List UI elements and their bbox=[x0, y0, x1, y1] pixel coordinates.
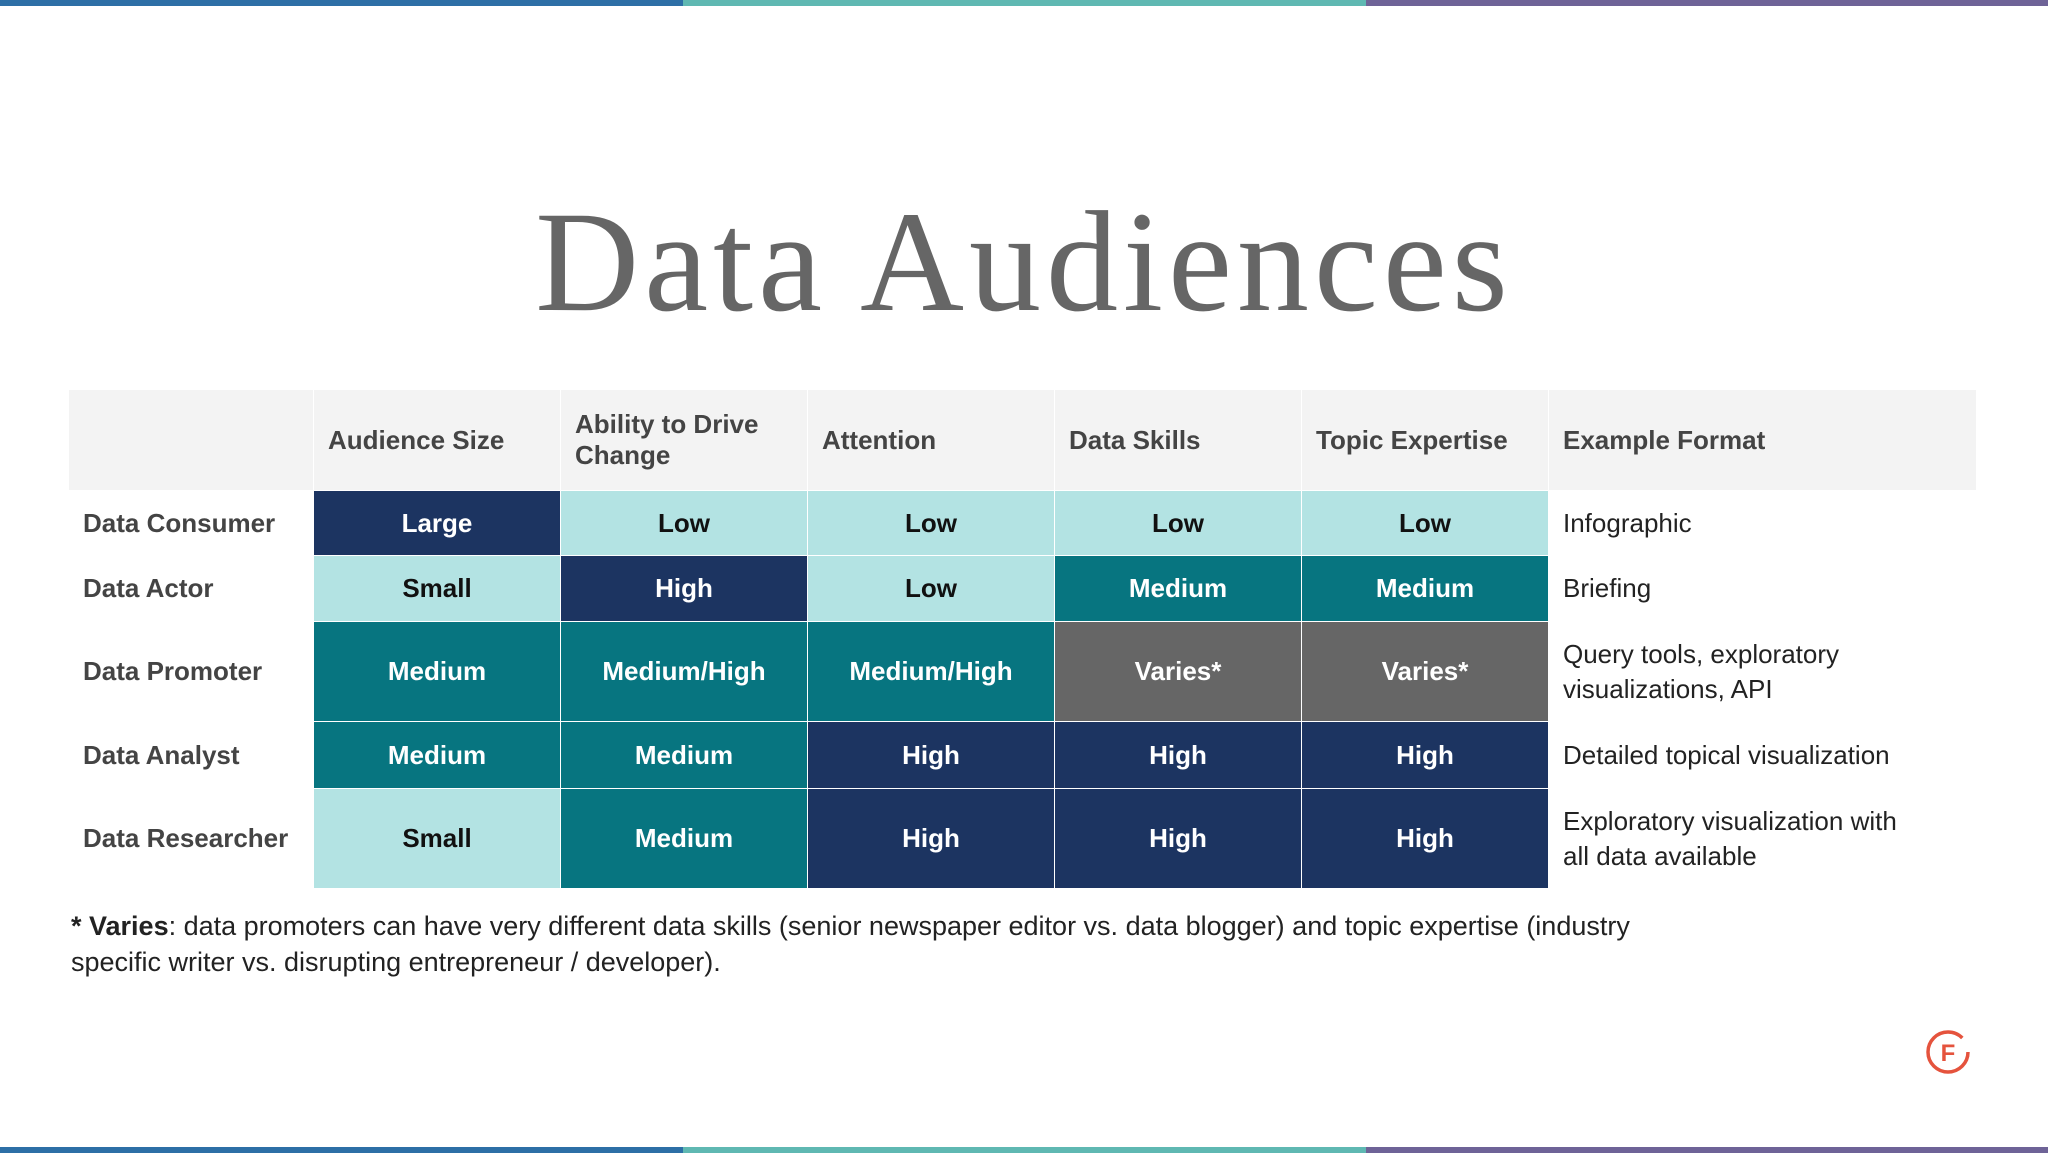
title: Data Audiences bbox=[535, 183, 1513, 342]
table: data audiences: Large bbox=[402, 508, 472, 538]
table: data audiences: High bbox=[1149, 823, 1207, 853]
table: data audiences: Topic Expertise bbox=[1316, 424, 1508, 454]
table: data audiences: High bbox=[655, 573, 713, 603]
icon: logo: F bbox=[1941, 1040, 1955, 1067]
table: data audiences: Varies* bbox=[1382, 656, 1468, 686]
table: data audiences: Audience Size bbox=[328, 424, 504, 454]
table: data audiences: Medium bbox=[388, 740, 486, 770]
table: data audiences: High bbox=[1396, 740, 1454, 770]
table: data audiences: High bbox=[902, 740, 960, 770]
table: data audiences: Example Format bbox=[1563, 424, 1765, 454]
table: data audiences: Infographic bbox=[1563, 508, 1692, 538]
table: data audiences: Attention bbox=[822, 424, 936, 454]
table: data audiences: Data Promoter bbox=[83, 656, 262, 686]
footnote: * Varies: data promoters can have very different data skills (senior newspaper editor vs. data blogger) and topic expertise (industry specific writer vs. disrupting entrepreneur / developer). bbox=[71, 911, 1630, 977]
table: data audiences: Low bbox=[658, 508, 710, 538]
table: data audiences: High bbox=[1396, 823, 1454, 853]
table: data audiences: Detailed topical visualization bbox=[1563, 740, 1890, 770]
table: data audiences: Data Actor bbox=[83, 573, 214, 603]
table: data audiences: Small bbox=[402, 823, 472, 853]
table: data audiences: Data Analyst bbox=[83, 740, 240, 770]
table: data audiences: Medium bbox=[635, 823, 733, 853]
table: data audiences: Low bbox=[1399, 508, 1451, 538]
table: data audiences: Medium/High bbox=[602, 656, 766, 686]
icon: logo bbox=[1926, 1030, 1970, 1074]
table: data audiences: Small bbox=[402, 573, 472, 603]
table: data audiences: Exploratory visualization with all data available bbox=[1563, 806, 1897, 870]
table: data audiences: Query tools, exploratory visualizations, API bbox=[1563, 638, 1839, 704]
table: data audiences: Data Researcher bbox=[83, 823, 288, 853]
table: data audiences: Low bbox=[905, 508, 957, 538]
table: data audiences: Data Consumer bbox=[83, 508, 275, 538]
table: data audiences bbox=[69, 390, 1976, 888]
table: data audiences: Low bbox=[905, 573, 957, 603]
table: data audiences: High bbox=[902, 823, 960, 853]
table: data audiences: Medium bbox=[388, 656, 486, 686]
table: data audiences: Ability to Drive Change bbox=[575, 409, 758, 470]
table: data audiences: Medium bbox=[1376, 573, 1474, 603]
table: data audiences: Medium/High bbox=[849, 656, 1013, 686]
table: data audiences: Low bbox=[1152, 508, 1204, 538]
table: data audiences: Varies* bbox=[1135, 656, 1221, 686]
table: data audiences: High bbox=[1149, 740, 1207, 770]
table: data audiences: Medium bbox=[635, 740, 733, 770]
table: data audiences: Data Skills bbox=[1069, 424, 1201, 454]
table: data audiences: Briefing bbox=[1563, 573, 1651, 603]
table: data audiences: Medium bbox=[1129, 573, 1227, 603]
